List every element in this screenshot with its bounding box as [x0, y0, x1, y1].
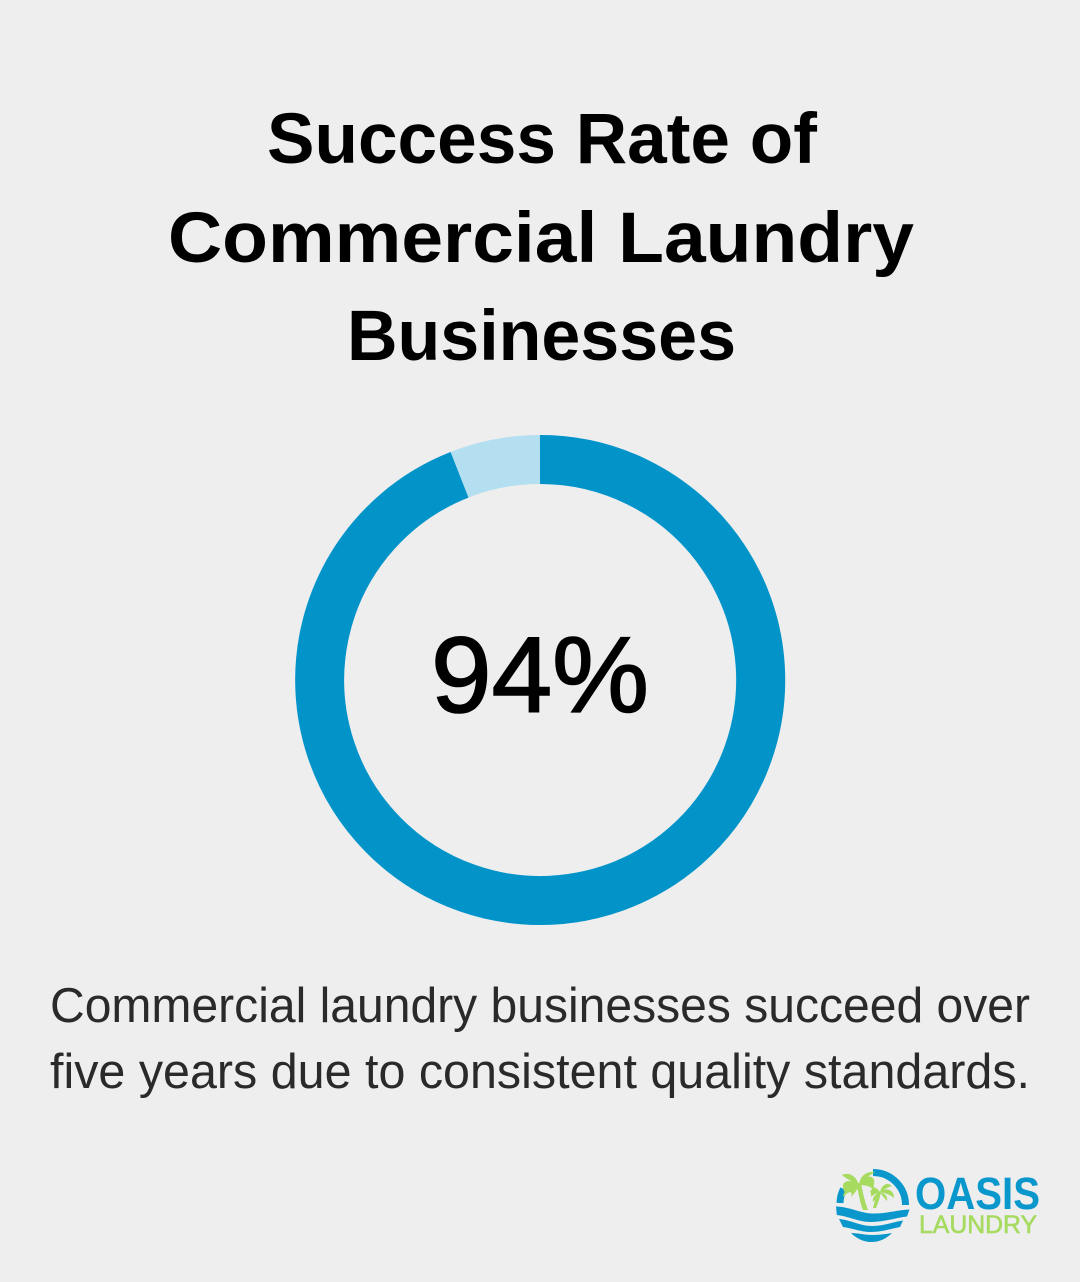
title: Commercial Laundry [168, 199, 915, 278]
logo: Oasis Laundry [836, 1168, 1040, 1242]
icon: palm trees [842, 1172, 894, 1210]
description text: five years due to consistent quality standards. [50, 1045, 1030, 1099]
donut chart: 94% [320, 459, 761, 900]
title: Success Rate of [267, 100, 817, 179]
title [168, 100, 915, 376]
description text [50, 979, 1030, 1099]
description text: Commercial laundry businesses succeed over [50, 979, 1030, 1033]
logo wordmark: OASIS: OASIS [915, 1168, 1040, 1219]
title: Businesses [347, 297, 736, 376]
icon: ring and waves [836, 1172, 910, 1242]
value: 94%: 94% [431, 614, 649, 735]
logo wordmark: LAUNDRY: LAUNDRY [919, 1211, 1037, 1239]
